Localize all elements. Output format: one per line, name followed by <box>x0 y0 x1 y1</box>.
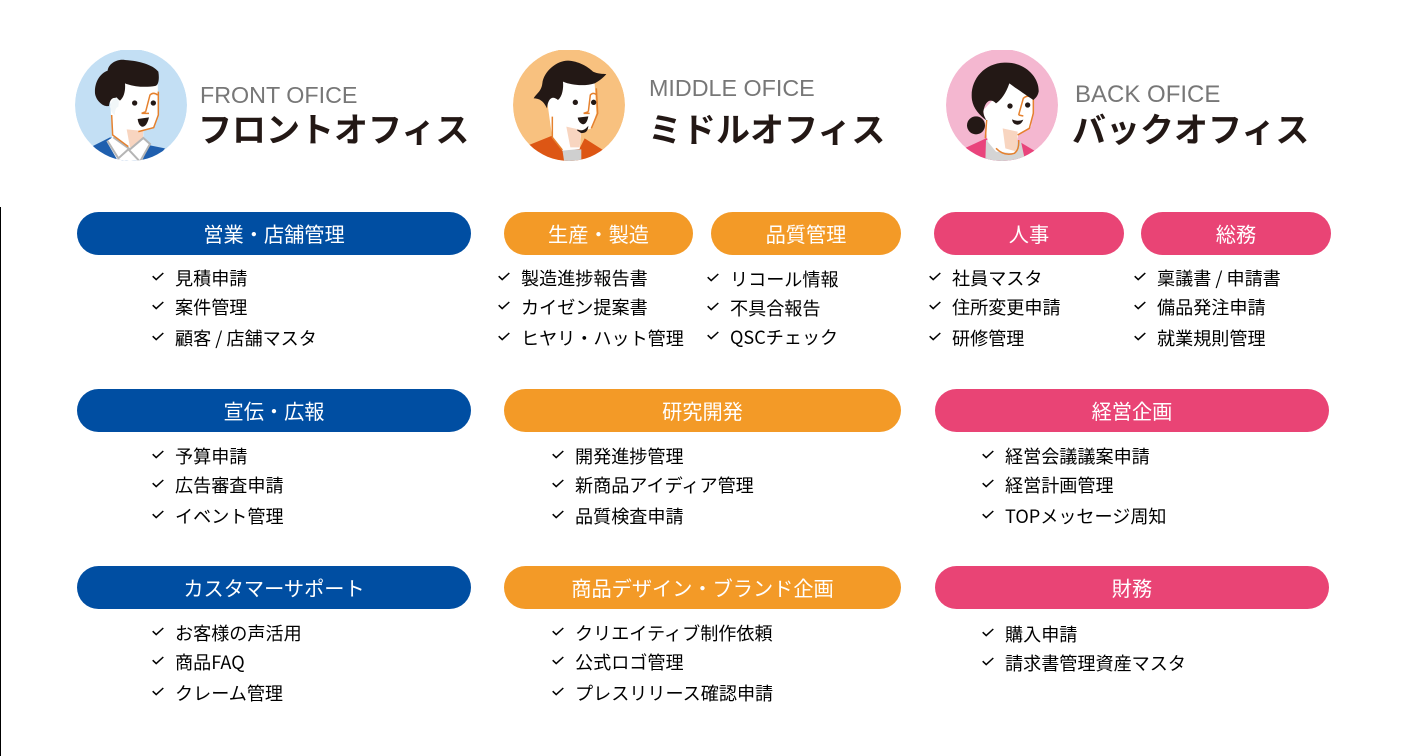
pill: quality control <box>711 212 901 255</box>
pill: general affairs <box>1141 212 1331 255</box>
pill: production <box>504 212 693 255</box>
pill: advertising and PR: 宣伝・広報 <box>224 402 324 424</box>
pill: finance <box>935 566 1329 609</box>
list: research and development: 品質検査申請 <box>575 503 684 529</box>
heading: front office: フロントオフィス <box>198 103 469 152</box>
list: customer support: クレーム管理 <box>175 680 283 706</box>
list: general affairs <box>1134 265 1281 351</box>
list: product design and brand planning: 公式ロゴ管理 <box>575 649 684 675</box>
list: customer support: お客様の声活用 <box>175 620 302 646</box>
heading: back office <box>1072 81 1309 152</box>
icon: back office avatar <box>946 50 1058 161</box>
list: customer support: 商品FAQ <box>175 649 245 675</box>
icon: front office avatar <box>75 50 187 161</box>
list: general affairs: 稟議書 / 申請書 <box>1157 265 1281 291</box>
pill: human resources <box>934 212 1124 255</box>
pill: customer support <box>77 566 471 609</box>
list: production: ヒヤリ・ハット管理 <box>521 325 684 351</box>
list: product design and brand planning: プレスリリース確認申請 <box>575 680 773 706</box>
list: finance: 購入申請 <box>1005 621 1077 647</box>
pill: sales and store management: 営業・店舗管理 <box>203 225 345 247</box>
list: corporate planning: TOPメッセージ周知 <box>1005 503 1167 529</box>
list: product design and brand planning <box>552 620 773 706</box>
list: advertising and PR: イベント管理 <box>175 503 284 529</box>
list: general affairs: 就業規則管理 <box>1157 325 1266 351</box>
icon: middle office avatar <box>513 50 625 161</box>
list: human resources: 住所変更申請 <box>952 294 1061 320</box>
heading: middle office <box>648 75 885 152</box>
pill: research and development <box>504 389 901 432</box>
list: research and development <box>552 443 754 529</box>
list: human resources: 研修管理 <box>952 325 1024 351</box>
list: human resources: 社員マスタ <box>952 265 1042 291</box>
pill: human resources: 人事 <box>1009 225 1049 247</box>
list: quality control: リコール情報 <box>730 266 839 292</box>
pill: customer support: カスタマーサポート <box>183 579 365 601</box>
list: advertising and PR <box>152 443 284 529</box>
heading: back office: BACK OFICE <box>1075 81 1220 108</box>
list: general affairs: 備品発注申請 <box>1157 294 1266 320</box>
pill: research and development: 研究開発 <box>662 402 743 424</box>
list: finance <box>982 621 1186 676</box>
heading: back office: バックオフィス <box>1072 103 1309 152</box>
list: corporate planning <box>982 443 1167 529</box>
pill: finance: 財務 <box>1112 579 1152 601</box>
list: product design and brand planning: クリエイティブ制作依頼 <box>575 620 773 646</box>
pill: sales and store management <box>77 212 471 255</box>
list: production: カイゼン提案書 <box>521 294 648 320</box>
pill: product design and brand planning: 商品デザイン・ブランド企画 <box>571 579 834 601</box>
heading: front office: FRONT OFICE <box>200 82 357 108</box>
list: quality control: 不具合報告 <box>730 295 820 321</box>
pill: production: 生産・製造 <box>548 225 649 247</box>
pill: general affairs: 総務 <box>1216 225 1256 247</box>
list: customer support <box>152 620 302 706</box>
list: corporate planning: 経営計画管理 <box>1005 472 1114 498</box>
list: production: 製造進捗報告書 <box>521 265 648 291</box>
pill: advertising and PR <box>77 389 471 432</box>
heading: middle office: ミドルオフィス <box>648 103 885 152</box>
pill: product design and brand planning <box>504 566 901 609</box>
list: advertising and PR: 予算申請 <box>175 443 247 469</box>
list: advertising and PR: 広告審査申請 <box>175 472 284 498</box>
pill: quality control: 品質管理 <box>766 225 846 247</box>
heading: middle office: MIDDLE OFICE <box>649 75 815 101</box>
list: human resources <box>929 265 1061 351</box>
list: finance: 請求書管理資産マスタ <box>1005 650 1186 676</box>
list: sales and store management: 見積申請 <box>175 265 247 291</box>
list: sales and store management <box>152 265 317 351</box>
list: sales and store management: 顧客 / 店舗マスタ <box>175 325 317 351</box>
list: quality control <box>707 266 839 350</box>
pill: corporate planning: 経営企画 <box>1092 402 1172 424</box>
list: research and development: 開発進捗管理 <box>575 443 684 469</box>
list: research and development: 新商品アイディア管理 <box>575 472 754 498</box>
list: sales and store management: 案件管理 <box>175 294 247 320</box>
list: corporate planning: 経営会議議案申請 <box>1005 443 1150 469</box>
list: production <box>498 265 684 351</box>
list: quality control: QSCチェック <box>730 324 838 350</box>
pill: corporate planning <box>935 389 1329 432</box>
